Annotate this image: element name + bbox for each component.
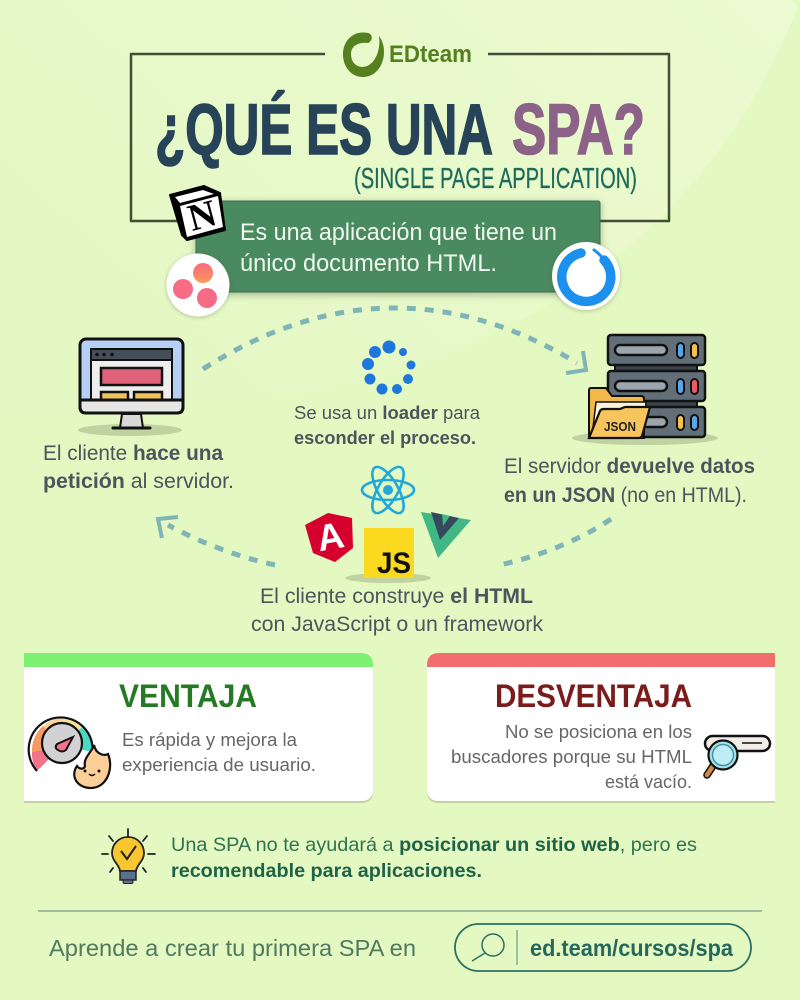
search pill bbox=[455, 924, 751, 971]
icon: light bulb bbox=[102, 829, 155, 884]
text: advantage description bbox=[122, 730, 316, 775]
subtitle: (SINGLE PAGE APPLICATION) bbox=[354, 163, 637, 195]
text: disadvantage description: No se posiciona en los bbox=[505, 722, 692, 742]
text: client builds HTML: con JavaScript o un framework bbox=[251, 613, 543, 636]
text: tip: Una SPA no te ayudará a posicionar un sitio web, pero es bbox=[171, 834, 697, 856]
text: advantage description: Es rápida y mejora la bbox=[122, 730, 298, 750]
text: server returns JSON: en un JSON (no en HTML). bbox=[504, 484, 747, 507]
text: loader: Se usa un loader para bbox=[294, 403, 481, 423]
icon: server with JSON folder bbox=[572, 335, 718, 445]
text: server returns JSON: El servidor devuelve datos bbox=[504, 455, 755, 478]
icon: Vue bbox=[421, 512, 471, 558]
icon: Notion bbox=[170, 186, 225, 240]
panel: advantage bbox=[24, 653, 373, 803]
arrow: framework to client bbox=[158, 517, 275, 565]
icon: monitor bbox=[78, 339, 183, 436]
heading: DESVENTAJA: DESVENTAJA bbox=[495, 678, 692, 714]
icon: JavaScript bbox=[364, 528, 414, 580]
text: tip: recomendable para aplicaciones. bbox=[171, 860, 482, 882]
text: loader bbox=[294, 403, 481, 448]
icon: JavaScript: JS bbox=[377, 547, 411, 580]
icon: speedometer with flame bbox=[29, 717, 110, 788]
text: call to action: Aprende a crear tu primera SPA en bbox=[49, 935, 416, 961]
text: client request: petición al servidor. bbox=[43, 470, 234, 493]
text: disadvantage description: está vacío. bbox=[605, 772, 692, 792]
text: disadvantage description: buscadores porque su HTML bbox=[451, 747, 692, 767]
icon: Angular: A bbox=[314, 514, 347, 559]
text: disadvantage description bbox=[451, 722, 692, 792]
text: advantage description: experiencia de usuario. bbox=[122, 755, 316, 775]
text: client builds HTML: El cliente construye el HTML bbox=[260, 585, 533, 608]
text: client builds HTML bbox=[251, 585, 543, 636]
arrow: server to client bbox=[500, 519, 611, 565]
text: loader: esconder el proceso. bbox=[294, 428, 476, 448]
icon: Notion: N bbox=[184, 192, 221, 240]
heading: VENTAJA: VENTAJA bbox=[119, 678, 257, 714]
arrow: client to server bbox=[203, 308, 586, 373]
icon: Angular bbox=[305, 513, 353, 562]
text: client request: El cliente hace una bbox=[43, 442, 223, 465]
title: SPA? bbox=[512, 91, 645, 170]
icon: server with JSON folder: JSON bbox=[604, 419, 636, 434]
icon: blue ring bbox=[552, 242, 620, 310]
panel: disadvantage bbox=[427, 653, 775, 803]
text: server returns JSON bbox=[504, 455, 755, 507]
text: client request bbox=[43, 442, 234, 493]
text: URL: ed.team/cursos/spa bbox=[530, 935, 733, 961]
definition box: único documento HTML. bbox=[240, 250, 497, 277]
logo: EDteam: EDteam bbox=[389, 41, 472, 68]
icon: React bbox=[362, 462, 414, 518]
icon: Asana bbox=[166, 254, 230, 316]
icon: shadow under JS bbox=[345, 573, 431, 583]
title frame bbox=[131, 54, 669, 221]
definition box: Es una aplicación que tiene un bbox=[240, 219, 557, 246]
icon: search bar with magnifier bbox=[705, 736, 770, 775]
logo: EDteam bbox=[343, 33, 472, 77]
text: tip bbox=[171, 834, 697, 882]
definition box bbox=[196, 201, 600, 292]
icon: magnifier bbox=[472, 934, 504, 961]
icon: loader bbox=[362, 340, 416, 394]
title: ¿QUÉ ES UNA bbox=[155, 91, 493, 170]
